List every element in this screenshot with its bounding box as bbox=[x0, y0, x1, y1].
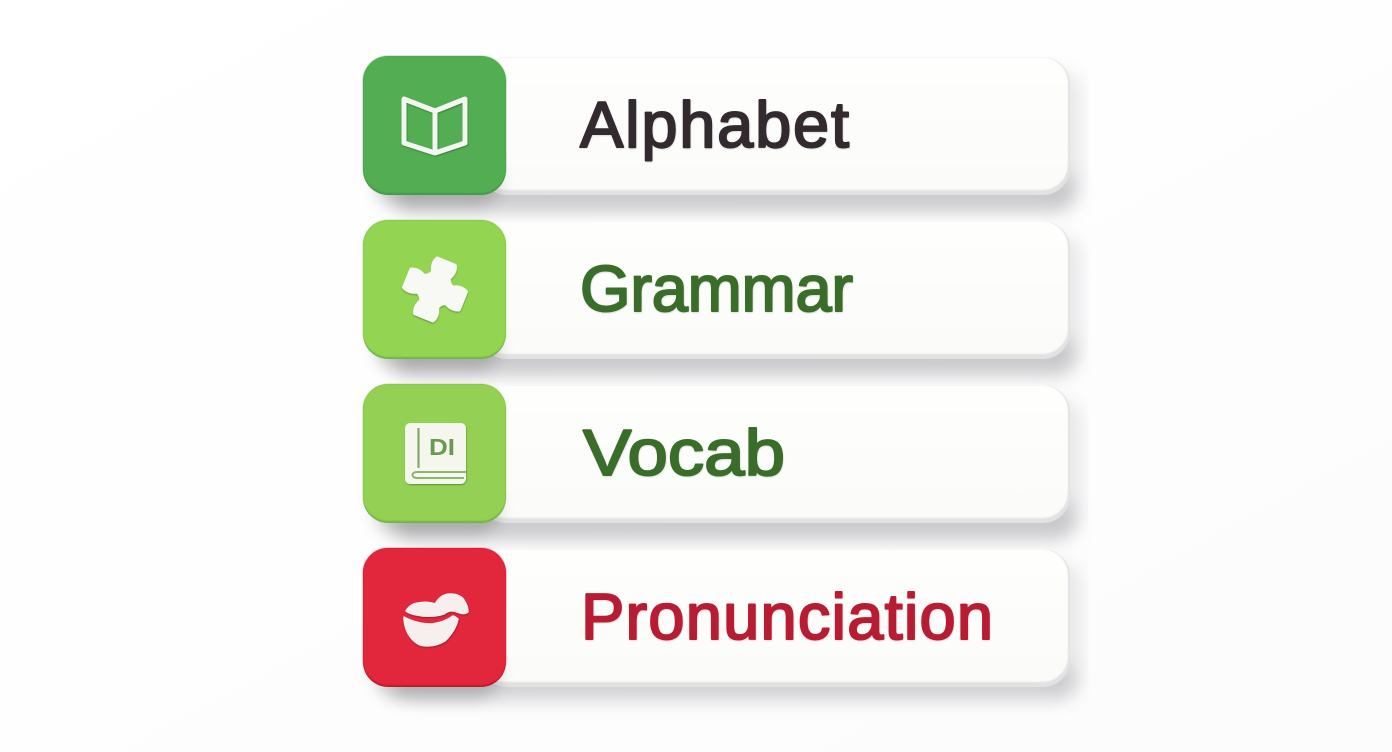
heading: Grammar: Grammar bbox=[580, 252, 853, 325]
heading: Vocab: Vocab bbox=[583, 416, 785, 489]
heading: Pronunciation: Pronunciation bbox=[581, 580, 993, 653]
icon: dictionary book: DI bbox=[429, 434, 455, 460]
row: Vocab bbox=[363, 384, 1082, 540]
icon: open book bbox=[404, 99, 465, 153]
panel: Pronunciation label bar bbox=[480, 549, 1070, 687]
icon: dictionary book bbox=[405, 423, 466, 484]
panel: Grammar label bar bbox=[480, 221, 1070, 359]
row: Alphabet bbox=[363, 56, 1082, 212]
icon tile: puzzle piece bbox=[363, 220, 506, 359]
icon tile: dictionary bbox=[363, 384, 506, 523]
row: Grammar bbox=[363, 220, 1082, 376]
row: Pronunciation bbox=[363, 548, 1082, 700]
panel: Vocab label bar bbox=[480, 385, 1070, 523]
icon tile: open book bbox=[363, 56, 506, 195]
heading: Alphabet: Alphabet bbox=[580, 88, 849, 161]
icon: puzzle piece bbox=[397, 251, 473, 328]
icon tile: lips bbox=[363, 548, 506, 687]
icon: lips bbox=[404, 594, 468, 646]
panel: Alphabet label bar bbox=[480, 57, 1070, 195]
